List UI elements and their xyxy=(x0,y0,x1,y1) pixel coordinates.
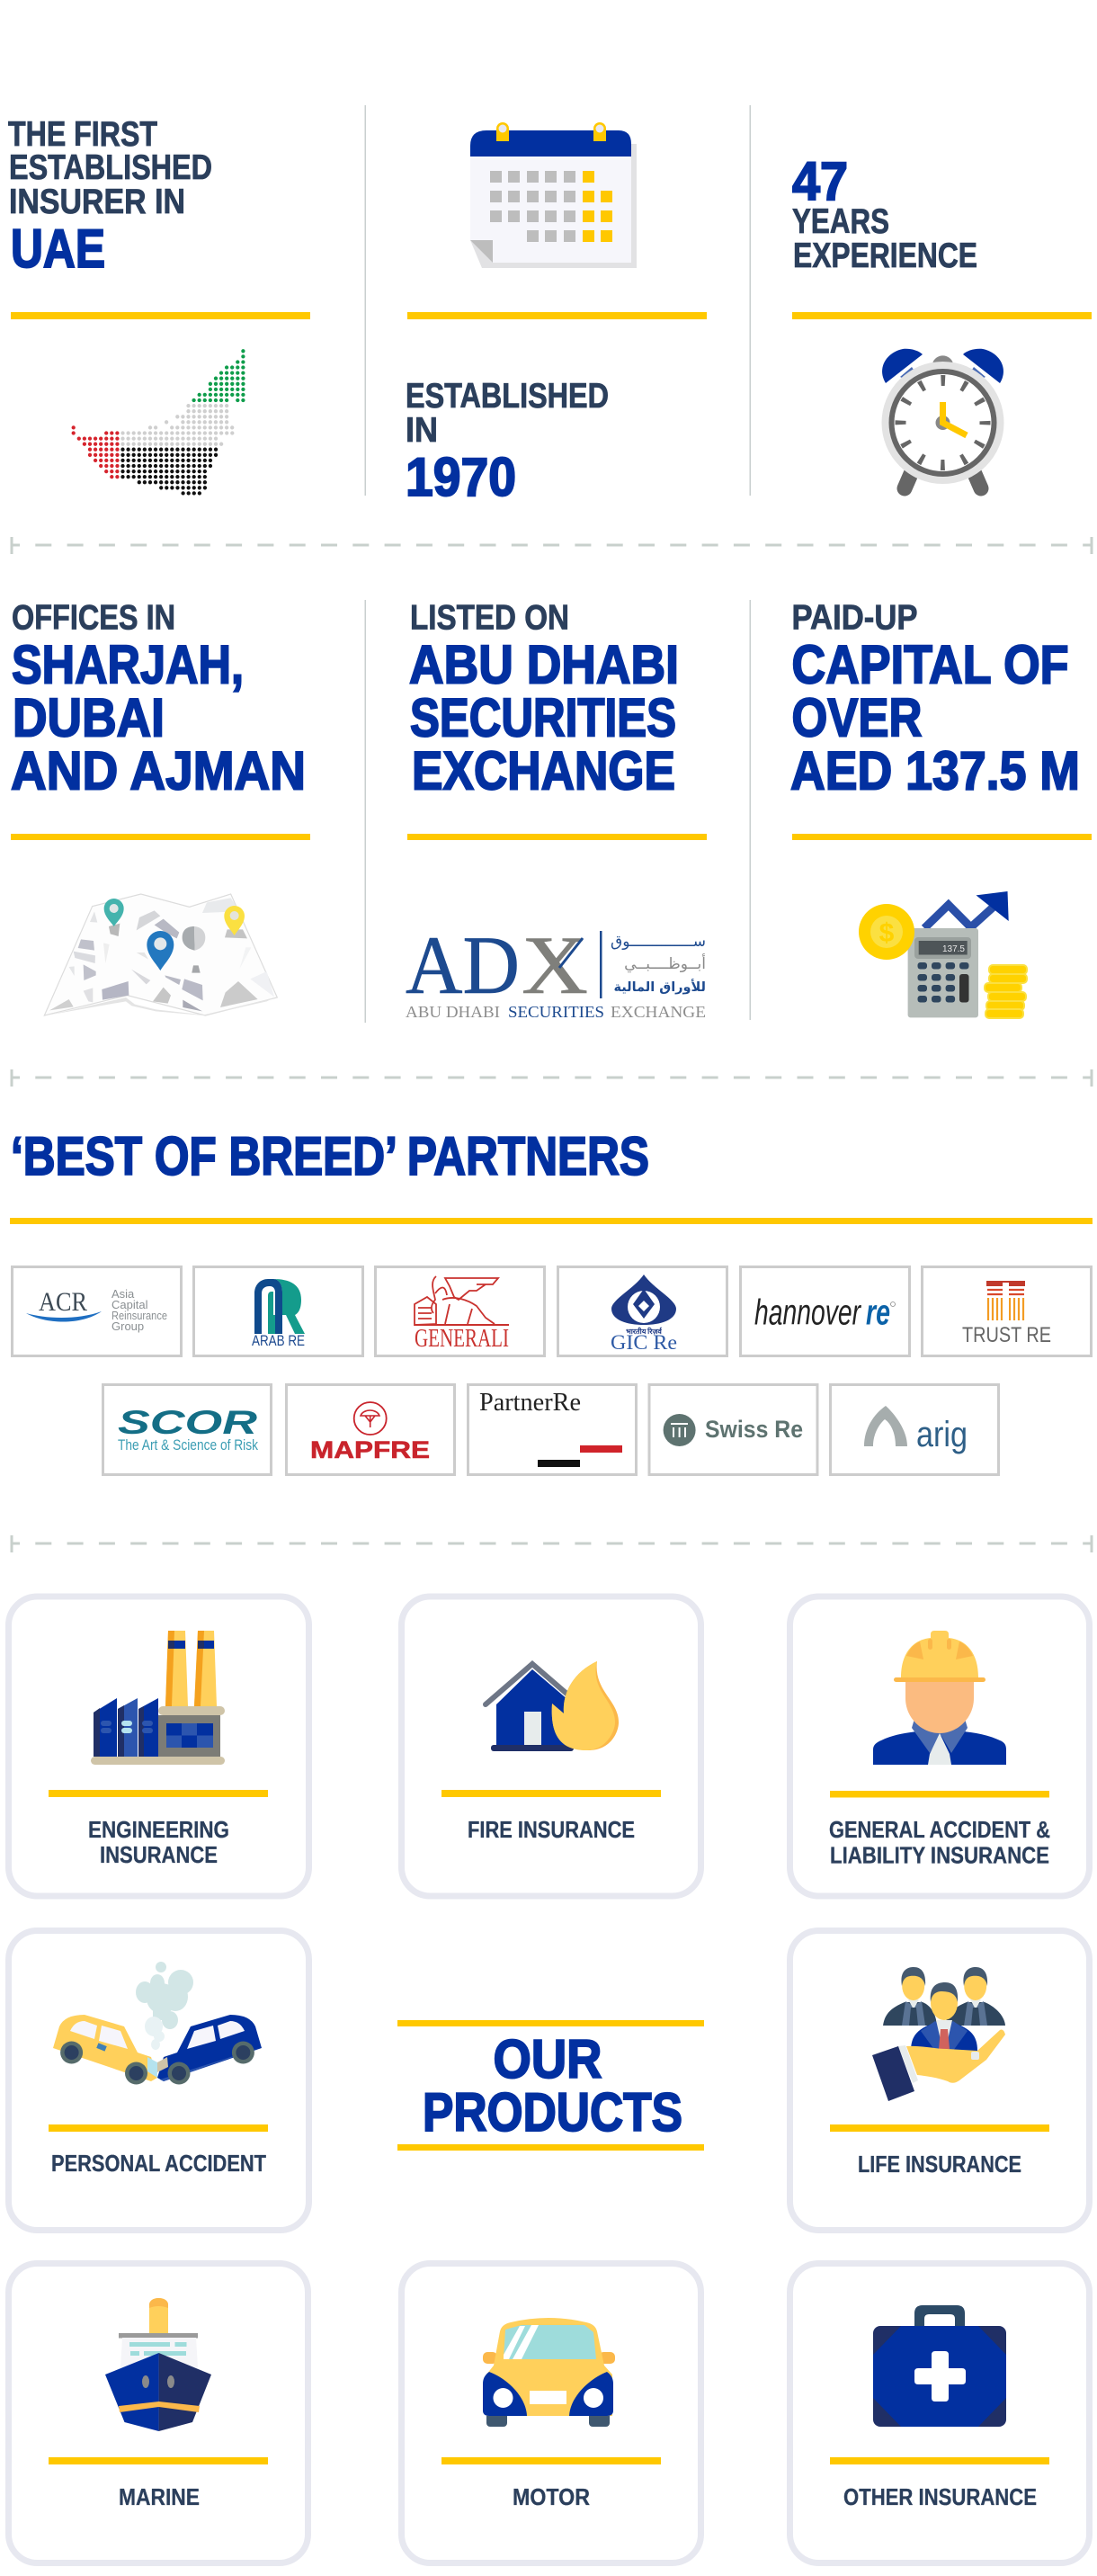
dashed separator three xyxy=(11,1535,1092,1552)
product card: personal accident xyxy=(9,1930,309,2231)
yellow car xyxy=(53,2015,157,2085)
section title: our products: PRODUCTS xyxy=(423,2082,682,2142)
label: motor: MOTOR xyxy=(513,2483,590,2510)
logo tile: ACR: Reinsurance xyxy=(111,1309,167,1322)
heading: 47 years experience xyxy=(792,151,977,275)
icon: people held in a hand xyxy=(872,1967,1005,2101)
blue car xyxy=(157,2015,262,2085)
logo: ADX xyxy=(406,919,706,1021)
label: engineering insurance xyxy=(88,1816,229,1868)
logo tile: GIC Re: भारतीय रिज़र्व xyxy=(626,1327,663,1337)
logo tile: Arab Re: ARAB RE xyxy=(252,1332,305,1349)
section title: our products: OUR xyxy=(493,2029,602,2089)
panel: established in 1970 xyxy=(406,122,707,507)
label: other insurance: OTHER INSURANCE xyxy=(843,2483,1037,2510)
heading: the first established insurer in UAE: INSURER IN xyxy=(9,183,185,221)
heading: listed on Abu Dhabi Securities Exchange: LISTED ON xyxy=(410,599,569,637)
product card: motor xyxy=(401,2263,701,2563)
heading: the first established insurer in UAE: THE FIRST xyxy=(8,115,157,154)
heading: listed on Abu Dhabi Securities Exchange: SECURITIES xyxy=(410,687,676,748)
icon: worker with hard hat xyxy=(873,1631,1006,1765)
label: fire insurance: FIRE INSURANCE xyxy=(468,1816,635,1843)
heading: listed on Abu Dhabi Securities Exchange: EXCHANGE xyxy=(412,741,675,801)
product card: fire insurance xyxy=(401,1597,701,1896)
logo tile: PartnerRe: PartnerRe xyxy=(479,1388,581,1417)
logo tile: ACR: Asia xyxy=(111,1287,135,1301)
heading: established in 1970: 1970 xyxy=(406,447,516,507)
logo tile: ACR xyxy=(13,1266,182,1356)
vertical divider two xyxy=(750,105,751,496)
logo tile: ACR: Group xyxy=(111,1319,144,1333)
heading: listed on Abu Dhabi Securities Exchange: ABU DHABI xyxy=(409,635,679,694)
icon: ship xyxy=(105,2298,211,2431)
product card: engineering insurance xyxy=(9,1597,309,1896)
logo tile: Mapfre: MAPFRE xyxy=(310,1436,430,1463)
vertical divider four xyxy=(750,600,751,1020)
heading: the first established insurer in UAE: UAE xyxy=(11,219,105,279)
dashed separator one xyxy=(11,537,1092,554)
label: general accident and liability insurance: GENERAL ACCIDENT & xyxy=(829,1816,1050,1843)
heading: established in 1970: ESTABLISHED xyxy=(406,377,609,416)
heading: best of breed partners: ‘BEST OF BREED’ PARTNERS xyxy=(11,1126,649,1186)
product card: general accident and liability insurance xyxy=(789,1597,1090,1896)
heading: the first established insurer in UAE xyxy=(8,115,212,279)
label: engineering insurance: INSURANCE xyxy=(100,1841,218,1868)
icon: alarm clock xyxy=(881,349,1003,488)
icon: calculator, coins and rising arrow: 137.5 xyxy=(942,944,965,954)
heading: paid-up capital of over AED 137.5 M: PAID-UP xyxy=(791,599,917,637)
heading: paid-up capital of over AED 137.5 M: OVER xyxy=(791,687,923,748)
panel: offices xyxy=(11,599,310,1015)
heading: offices in Sharjah, Dubai and Ajman: OFFICES IN xyxy=(12,599,175,637)
heading: offices in Sharjah, Dubai and Ajman: DUBAI xyxy=(13,687,165,748)
label: marine: MARINE xyxy=(119,2483,200,2510)
dashed separator two xyxy=(11,1069,1092,1087)
heading: offices in Sharjah, Dubai and Ajman xyxy=(11,599,306,801)
heading: offices in Sharjah, Dubai and Ajman: AND AJMAN xyxy=(11,741,306,801)
logo tile: Hannover Re: re xyxy=(866,1293,890,1333)
label: personal accident: PERSONAL ACCIDENT xyxy=(51,2150,266,2177)
panel: listed on ADX xyxy=(406,599,707,1021)
logo tile: Swiss Re xyxy=(649,1385,817,1475)
logo: ADX: للأوراق المالية xyxy=(613,979,706,995)
heading: 47 years experience: 47 xyxy=(792,151,848,211)
icon: calculator, coins and rising arrow xyxy=(859,891,1027,1018)
logo tile: Trust Re: TRUST RE xyxy=(962,1323,1051,1347)
logo tile: ACR: Capital xyxy=(111,1298,148,1311)
panel: best of breed partners xyxy=(10,1126,1093,1475)
logo tile: Generali: GENERALI xyxy=(415,1324,509,1353)
logo tile: Swiss Re: Swiss Re xyxy=(705,1416,803,1443)
label: general accident and liability insurance xyxy=(829,1816,1050,1869)
icon: dotted UAE flag map xyxy=(74,351,244,493)
logo: ADX: SECURITIES xyxy=(508,1003,604,1021)
icon: map with pins xyxy=(44,894,277,1015)
panel: 47 years experience xyxy=(792,151,1092,488)
logo tile: ACR: ACR xyxy=(39,1287,87,1317)
panel: first established insurer xyxy=(8,115,310,493)
icon: car front view xyxy=(483,2318,615,2427)
logo tile: PartnerRe xyxy=(468,1385,637,1475)
panel: paid-up capital xyxy=(790,599,1092,1018)
logo tile: Arab Re xyxy=(194,1266,363,1356)
icon: calendar xyxy=(470,122,637,268)
heading: paid-up capital of over AED 137.5 M xyxy=(790,599,1080,801)
logo tile: SCOR xyxy=(103,1385,272,1475)
label: engineering insurance: ENGINEERING xyxy=(88,1816,229,1843)
heading: 47 years experience: EXPERIENCE xyxy=(793,237,977,275)
logo tile: GIC Re: GIC Re xyxy=(611,1331,677,1354)
logo tile: SCOR: SCOR xyxy=(118,1404,257,1441)
logo: ADX: AD xyxy=(406,919,520,1011)
icon: calculator, coins and rising arrow: $ xyxy=(879,918,895,948)
vertical divider three xyxy=(365,600,366,1023)
icon: first aid case xyxy=(873,2305,1006,2427)
icon: house on fire xyxy=(486,1661,619,1751)
product card: marine xyxy=(9,2263,308,2563)
logo: ADX: ســــــــــــــوق xyxy=(611,933,706,951)
logo tile: Generali xyxy=(376,1266,545,1356)
product card: other insurance xyxy=(789,2263,1090,2563)
section title: our products xyxy=(397,2020,704,2151)
icon: factory xyxy=(91,1631,225,1765)
heading: offices in Sharjah, Dubai and Ajman: SHARJAH, xyxy=(12,635,244,694)
logo tile: GIC Re xyxy=(557,1266,727,1356)
heading: 47 years experience: YEARS xyxy=(792,202,889,241)
vertical divider one xyxy=(365,105,366,496)
label: life insurance: LIFE INSURANCE xyxy=(858,2151,1021,2178)
logo tile: SCOR: The Art & Science of Risk xyxy=(118,1436,258,1453)
heading: listed on Abu Dhabi Securities Exchange xyxy=(409,599,679,801)
logo tile: Hannover Re: hannover xyxy=(754,1293,861,1333)
logo: ADX: أبــوظــــبــي xyxy=(624,953,706,973)
logo tile: Trust Re xyxy=(923,1266,1092,1356)
logo: ADX: EXCHANGE xyxy=(611,1003,706,1021)
logo tile: Mapfre xyxy=(286,1385,455,1475)
logo tile: Arig: arig xyxy=(916,1415,968,1454)
logo tile: Arig xyxy=(831,1385,998,1475)
logo tile: Hannover Re xyxy=(741,1266,910,1356)
label: general accident and liability insurance: LIABILITY INSURANCE xyxy=(830,1842,1049,1869)
heading: established in 1970: IN xyxy=(406,411,438,450)
logo: ADX: X xyxy=(522,919,588,1011)
heading: established in 1970 xyxy=(406,377,609,507)
logo: ADX: ABU DHABI xyxy=(406,1003,500,1021)
product card: life insurance xyxy=(789,1930,1090,2231)
icon: car collision with smoke xyxy=(53,1962,262,2085)
heading: the first established insurer in UAE: ESTABLISHED xyxy=(9,148,212,187)
